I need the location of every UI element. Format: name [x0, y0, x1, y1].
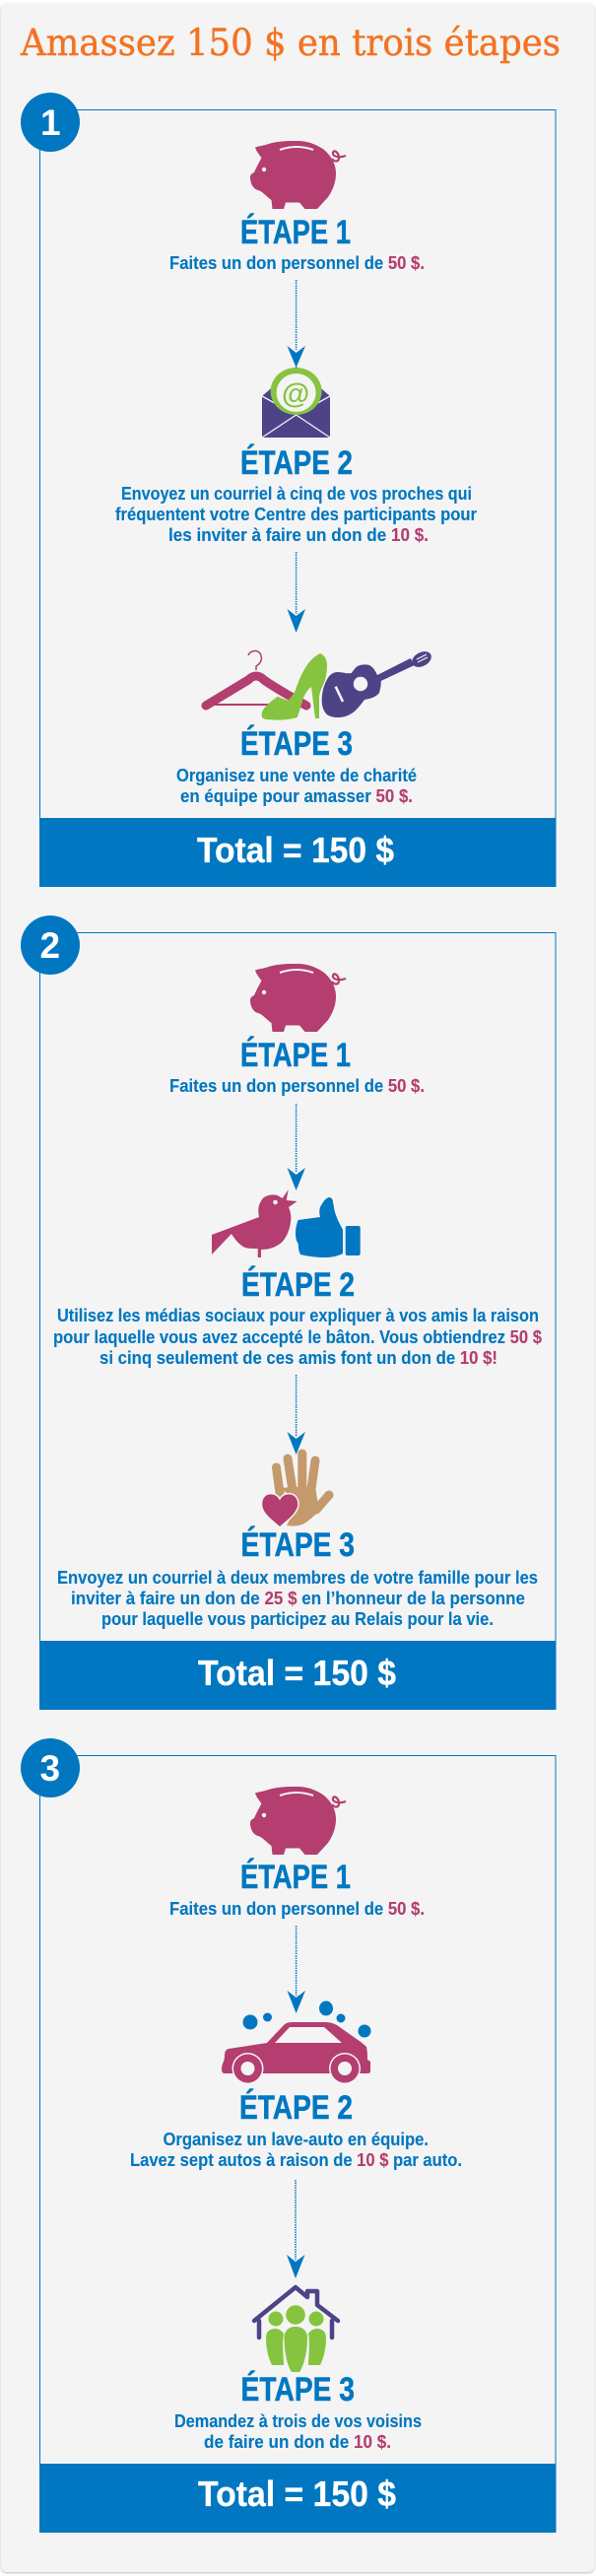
icon: piggy bank: [250, 964, 346, 1032]
panel: option 3: [21, 1738, 556, 2533]
total bar: [39, 818, 556, 887]
title: Amassez 150 $ en trois étapes: [20, 22, 561, 64]
text: step 2: si cinq seulement de ces amis font un don de 10 $!: [99, 1347, 497, 1368]
arrow: [287, 2180, 305, 2278]
text: step 3: Envoyez un courriel à deux membres de votre famille pour les: [57, 1567, 538, 1588]
text: step 2: fréquentent votre Centre des participants pour: [115, 504, 477, 524]
total bar: [39, 2464, 556, 2533]
icon: envelope with at sign: [262, 367, 330, 438]
icon: piggy bank: [250, 141, 346, 209]
heading: etape 1: ÉTAPE 1: [240, 1859, 351, 1896]
arrow: [288, 280, 305, 368]
heading: etape 1: ÉTAPE 1: [240, 1037, 351, 1074]
text: step 2: Envoyez un courriel à cinq de vos proches qui: [121, 483, 472, 504]
number badge 3: [21, 1738, 80, 1797]
text: step 2: Lavez sept autos à raison de 10 $ par auto.: [130, 2149, 462, 2170]
arrow: [288, 1104, 305, 1190]
arrow: [288, 1926, 305, 2013]
heading: etape 3: ÉTAPE 3: [240, 1526, 355, 1564]
total bar: [39, 1641, 556, 1710]
icon: bird and thumbs up: [212, 1189, 361, 1257]
arrow: [288, 552, 305, 633]
icon: hand and heart: [261, 1454, 329, 1527]
total bar: Total = 150 $: [198, 2474, 396, 2514]
number badge 1: 1: [40, 102, 61, 143]
total bar: Total = 150 $: [197, 830, 394, 870]
text: step 3: [176, 765, 417, 806]
panel: option 1: [21, 93, 556, 887]
text: step 3: [57, 1567, 538, 1629]
text: step 3: inviter à faire un don de 25 $ en l’honneur de la personne: [71, 1588, 525, 1608]
heading: etape 3: ÉTAPE 3: [240, 725, 353, 763]
heading: etape 1: ÉTAPE 1: [240, 214, 351, 251]
text: step 3: Organisez une vente de charité: [176, 765, 417, 785]
panel: option 2: [21, 915, 556, 1710]
number badge 1: [21, 93, 80, 152]
heading: etape 2: ÉTAPE 2: [239, 2089, 353, 2127]
icon: house with people: [254, 2287, 338, 2372]
text: step 3: de faire un don de 10 $.: [204, 2431, 391, 2452]
text: step 3: [174, 2410, 422, 2452]
number badge 3: 3: [39, 1748, 60, 1789]
icon: envelope with at sign: @: [282, 378, 309, 410]
text: step 1: Faites un don personnel de 50 $.: [169, 1898, 425, 1919]
text: step 2: Utilisez les médias sociaux pour expliquer à vos amis la raison: [57, 1305, 539, 1325]
heading: etape 2: ÉTAPE 2: [241, 1266, 355, 1304]
panel 3 frame: [39, 1756, 556, 2475]
text: step 2: Organisez un lave-auto en équipe.: [164, 2129, 429, 2149]
icon: hanger, shoe and guitar: [206, 648, 434, 720]
heading: etape 2: ÉTAPE 2: [240, 444, 353, 482]
text: step 2: les inviter à faire un don de 10 $.: [168, 524, 429, 545]
text: step 2: [130, 2129, 462, 2170]
text: step 3: pour laquelle vous participez au Relais pour la vie.: [101, 1608, 494, 1629]
text: step 1: Faites un don personnel de 50 $.: [169, 1075, 425, 1096]
arrow: [288, 1375, 305, 1455]
text: step 3: Demandez à trois de vos voisins: [174, 2410, 422, 2431]
text: step 2: [53, 1305, 543, 1368]
icon: piggy bank: [250, 1787, 346, 1855]
text: step 1: Faites un don personnel de 50 $.: [169, 252, 425, 273]
icon: car and bubbles: [222, 2000, 370, 2084]
number badge 2: [21, 915, 80, 975]
text: step 2: pour laquelle vous avez accepté le bâton. Vous obtiendrez 50 $: [53, 1326, 543, 1347]
text: step 3: en équipe pour amasser 50 $.: [180, 785, 413, 806]
number badge 2: 2: [39, 925, 60, 966]
heading: etape 3: ÉTAPE 3: [240, 2371, 355, 2408]
text: step 2: [115, 483, 477, 545]
panel 1 frame: [39, 110, 556, 830]
total bar: Total = 150 $: [198, 1653, 396, 1693]
panel 2 frame: [39, 932, 556, 1652]
